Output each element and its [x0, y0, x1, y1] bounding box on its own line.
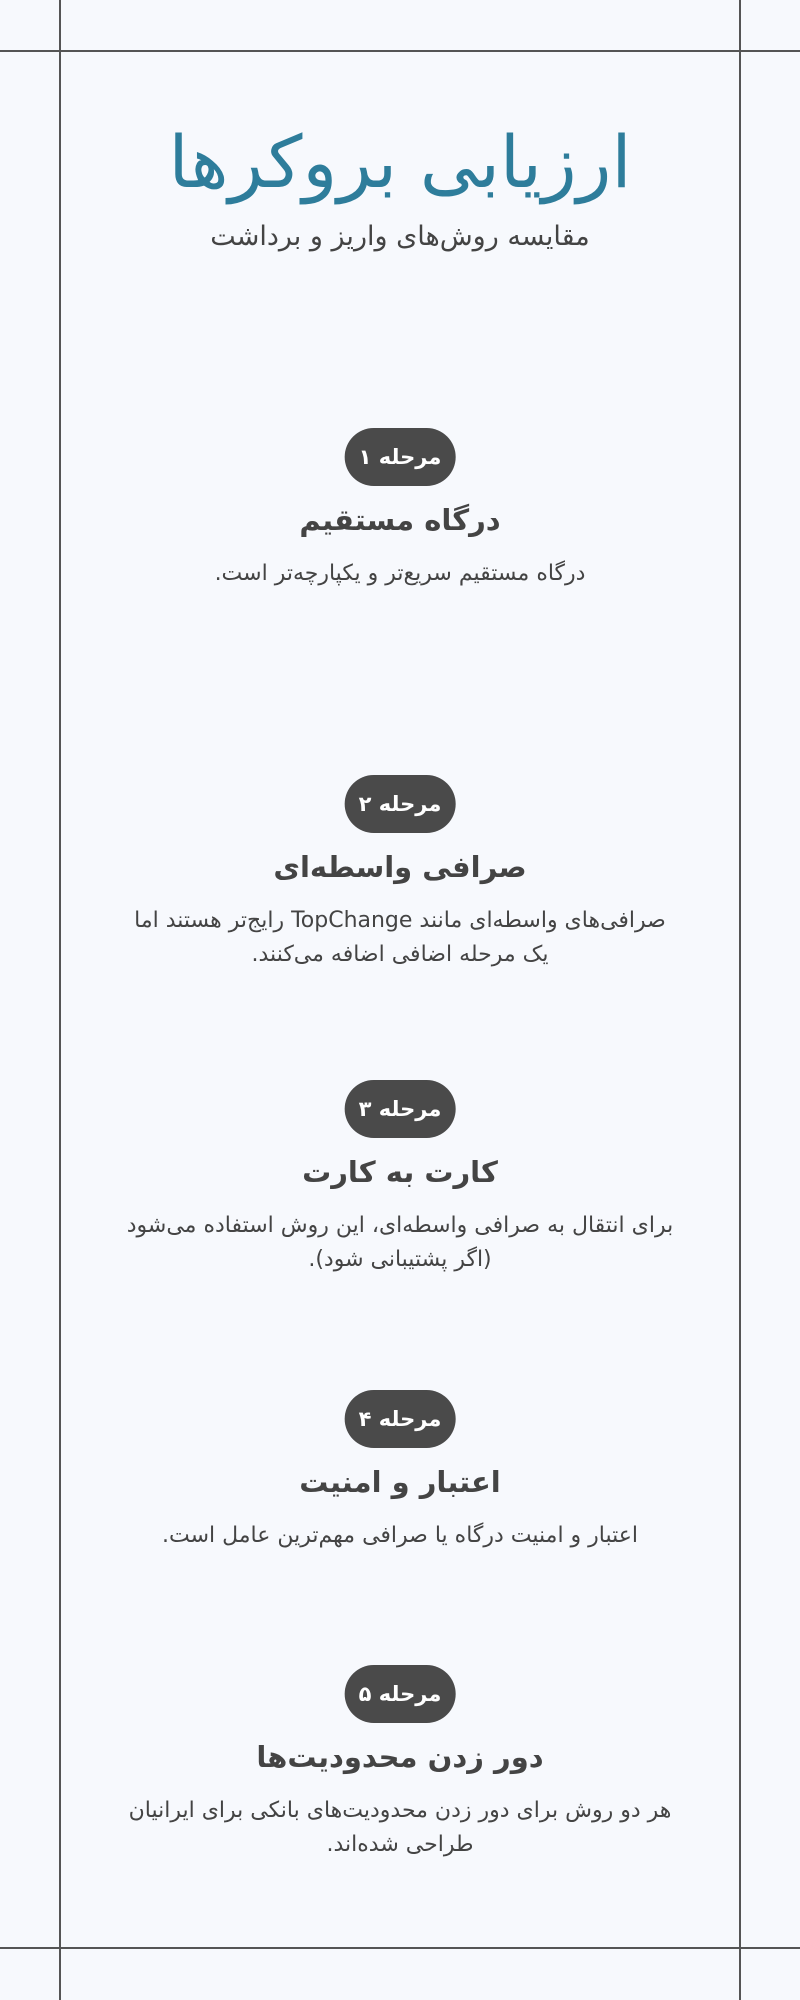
- panel: step 3: [127, 1080, 673, 1272]
- heading: step 4: اعتبار و امنیت: [299, 1465, 501, 1499]
- heading: step 1: درگاه مستقیم: [299, 503, 501, 537]
- text: step 5: [129, 1798, 671, 1857]
- text: step 2: یک مرحله اضافی اضافه می‌کنند.: [252, 942, 548, 967]
- text: step 3: برای انتقال به صرافی واسطه‌ای، این روش استفاده می‌شود: [127, 1213, 673, 1238]
- panel: step 5: [129, 1665, 671, 1857]
- title: ارزیابی بروکرها: [169, 120, 631, 204]
- text: step 2: [134, 908, 666, 967]
- badge: step 3: مرحله ۳: [359, 1097, 441, 1121]
- badge: step 1: مرحله ۱: [359, 445, 441, 469]
- panel: step 4: [162, 1390, 638, 1548]
- badge: step 5: مرحله ۵: [359, 1682, 441, 1706]
- text: step 2: صرافی‌های واسطه‌ای مانند TopChange رایج‌تر هستند اما: [134, 908, 666, 933]
- badge: step 5: [345, 1665, 455, 1723]
- panel: step 2: [134, 775, 666, 967]
- text: step 5: طراحی شده‌اند.: [326, 1832, 473, 1857]
- text: step 5: هر دو روش برای دور زدن محدودیت‌های بانکی برای ایرانیان: [129, 1798, 671, 1823]
- badge: step 4: [345, 1390, 455, 1448]
- badge: step 1: [345, 428, 455, 486]
- text: step 3: (اگر پشتیبانی شود).: [308, 1247, 492, 1272]
- badge: step 3: [345, 1080, 455, 1138]
- text: step 4: اعتبار و امنیت درگاه یا صرافی مهم‌ترین عامل است.: [162, 1523, 638, 1548]
- badge: step 2: [345, 775, 455, 833]
- subtitle: مقایسه روش‌های واریز و برداشت: [210, 221, 590, 252]
- badge: step 2: مرحله ۲: [359, 792, 441, 816]
- panel: step 1: [215, 428, 585, 586]
- heading: step 2: صرافی واسطه‌ای: [273, 850, 527, 884]
- heading: step 5: دور زدن محدودیت‌ها: [256, 1740, 544, 1774]
- text: step 3: [127, 1213, 673, 1272]
- heading: step 3: کارت به کارت: [302, 1155, 498, 1189]
- text: step 1: درگاه مستقیم سریع‌تر و یکپارچه‌تر است.: [215, 561, 585, 586]
- badge: step 4: مرحله ۴: [359, 1407, 441, 1431]
